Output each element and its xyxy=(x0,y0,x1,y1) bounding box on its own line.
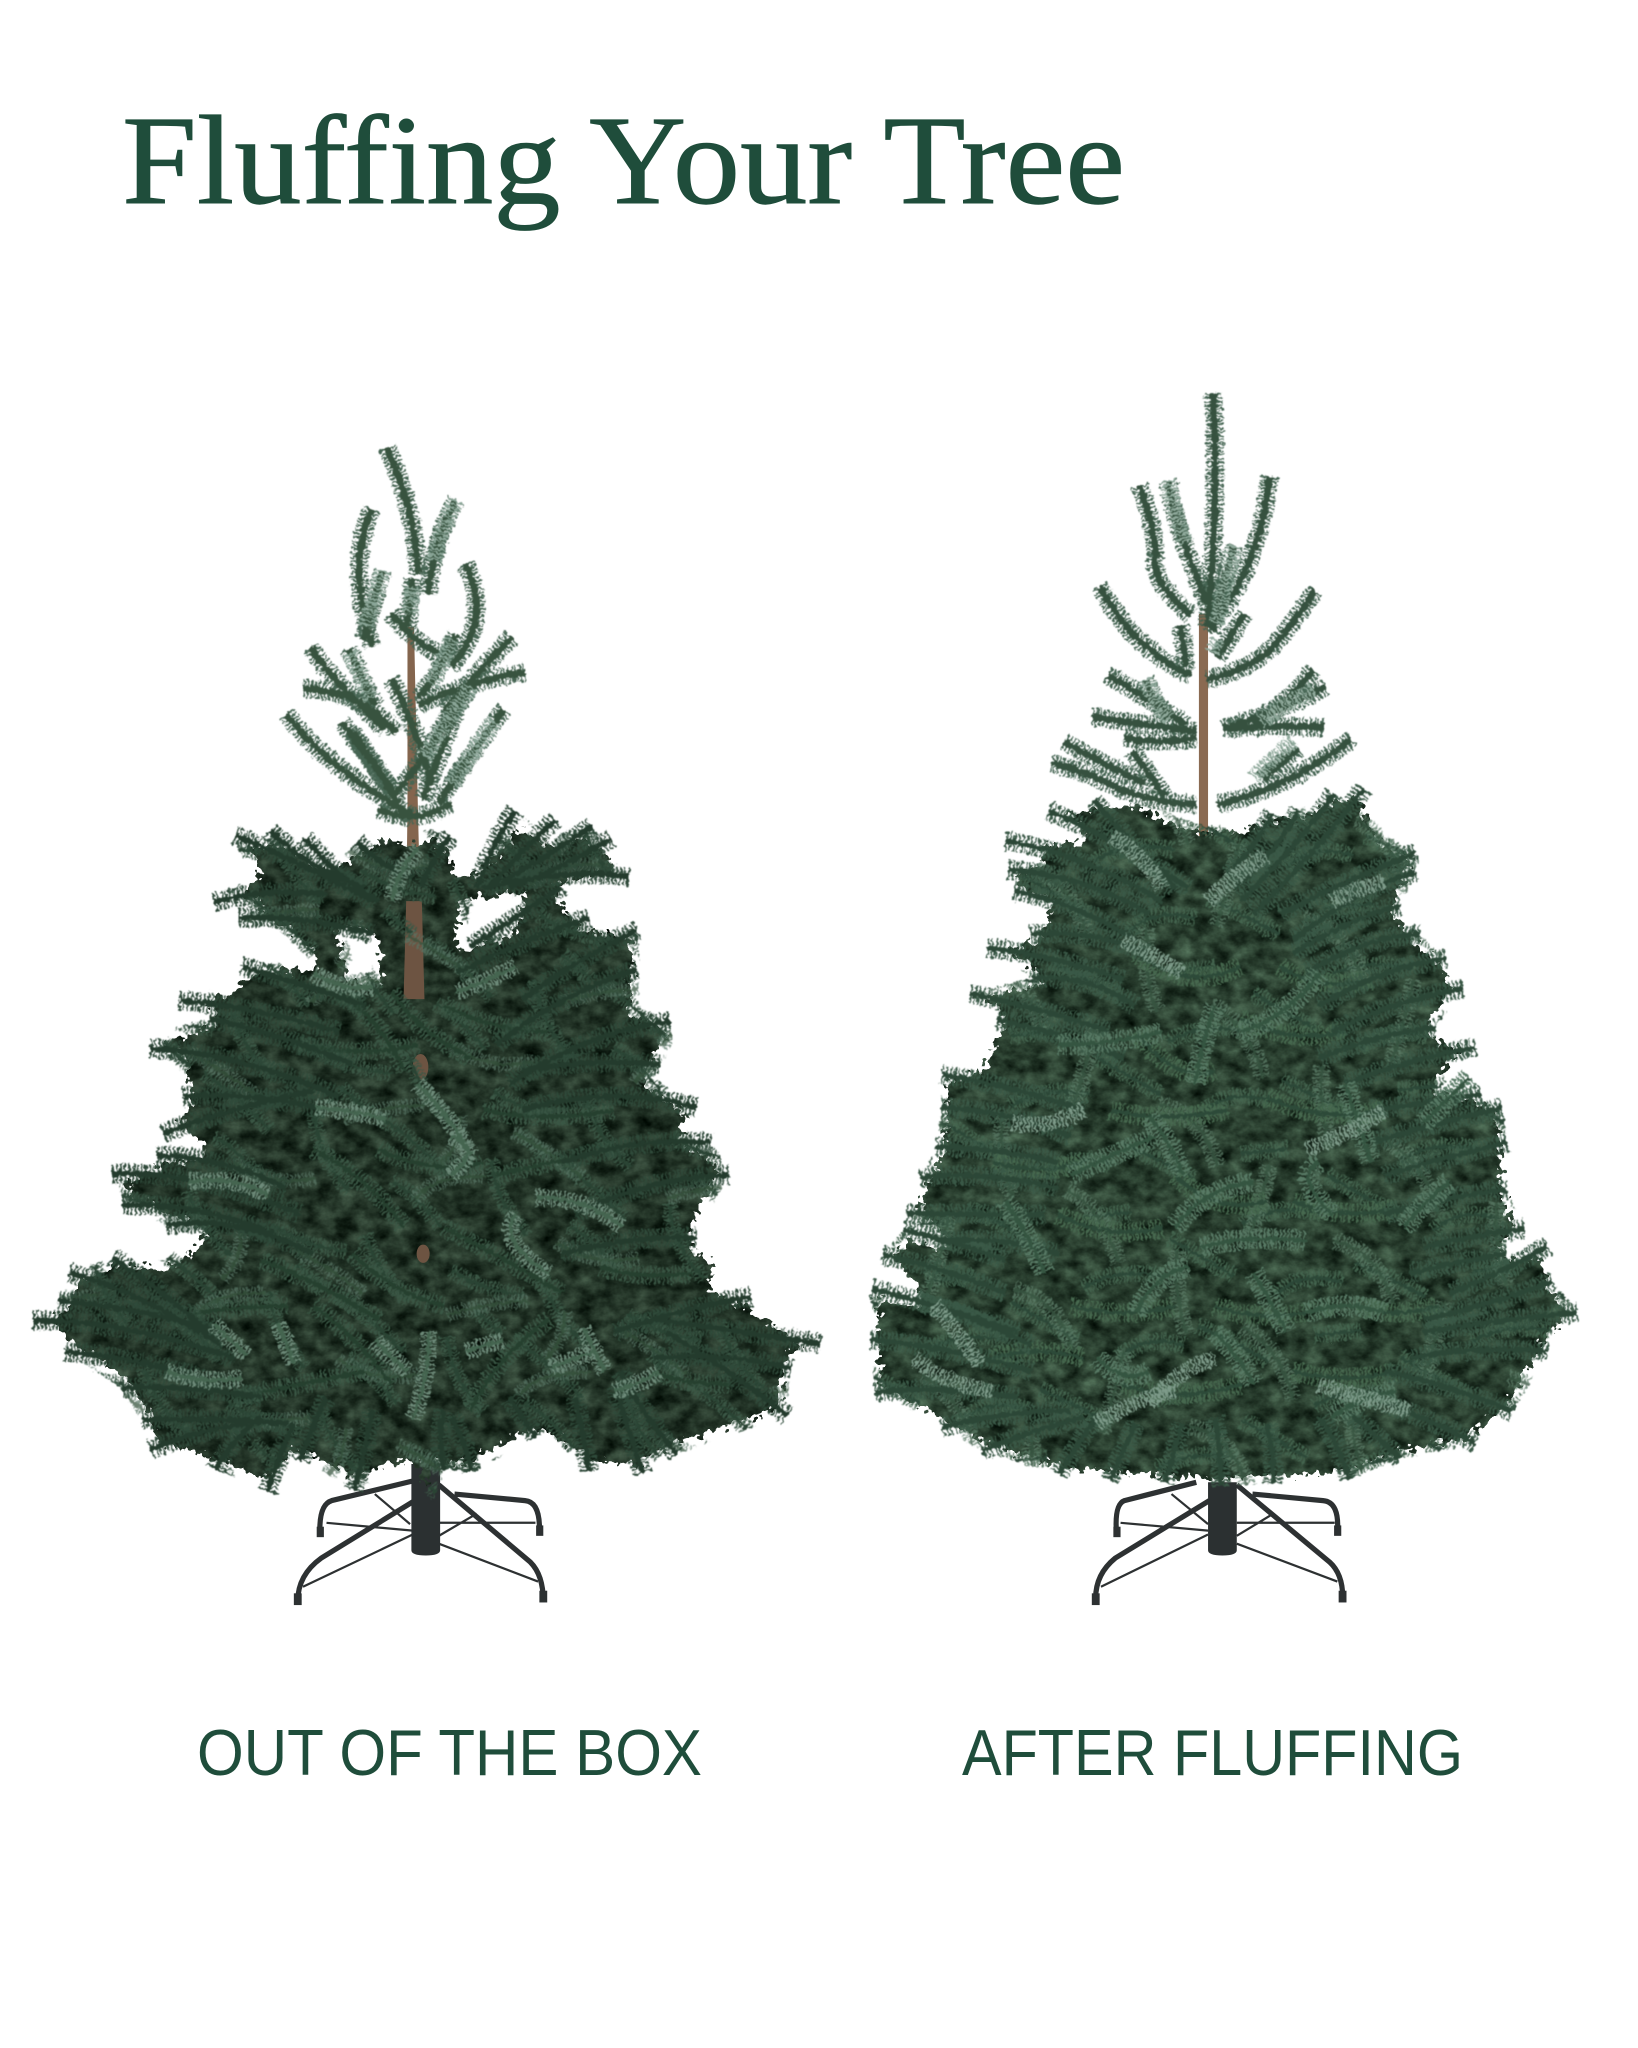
dense frond texture: right tree xyxy=(870,806,1575,1486)
spire branches: right tree xyxy=(1051,393,1352,804)
dense frond texture: left tree xyxy=(39,818,810,1500)
upper trunk: left tree xyxy=(404,627,424,999)
tree: after fluffing xyxy=(849,393,1606,1605)
tree: out of the box xyxy=(0,448,836,1605)
stand post: right tree xyxy=(1208,1482,1237,1555)
stand post: left tree xyxy=(411,1464,440,1555)
label: after fluffing: AFTER FLUFFING xyxy=(962,1716,1463,1789)
upper trunk: right tree xyxy=(1199,614,1208,836)
needle layers: right tree xyxy=(871,789,1578,1486)
foliage silhouette: left tree xyxy=(34,812,819,1515)
metal stand: right tree xyxy=(1092,1482,1346,1605)
visible trunk patches: left tree xyxy=(404,901,430,1263)
label: out of the box: OUT OF THE BOX xyxy=(197,1716,702,1789)
needle layers: left tree xyxy=(33,811,820,1491)
spire branches: left tree xyxy=(286,448,525,816)
foliage silhouette: right tree xyxy=(871,789,1578,1486)
title: Fluffing Your Tree xyxy=(122,91,1125,231)
metal stand: left tree xyxy=(294,1481,547,1605)
